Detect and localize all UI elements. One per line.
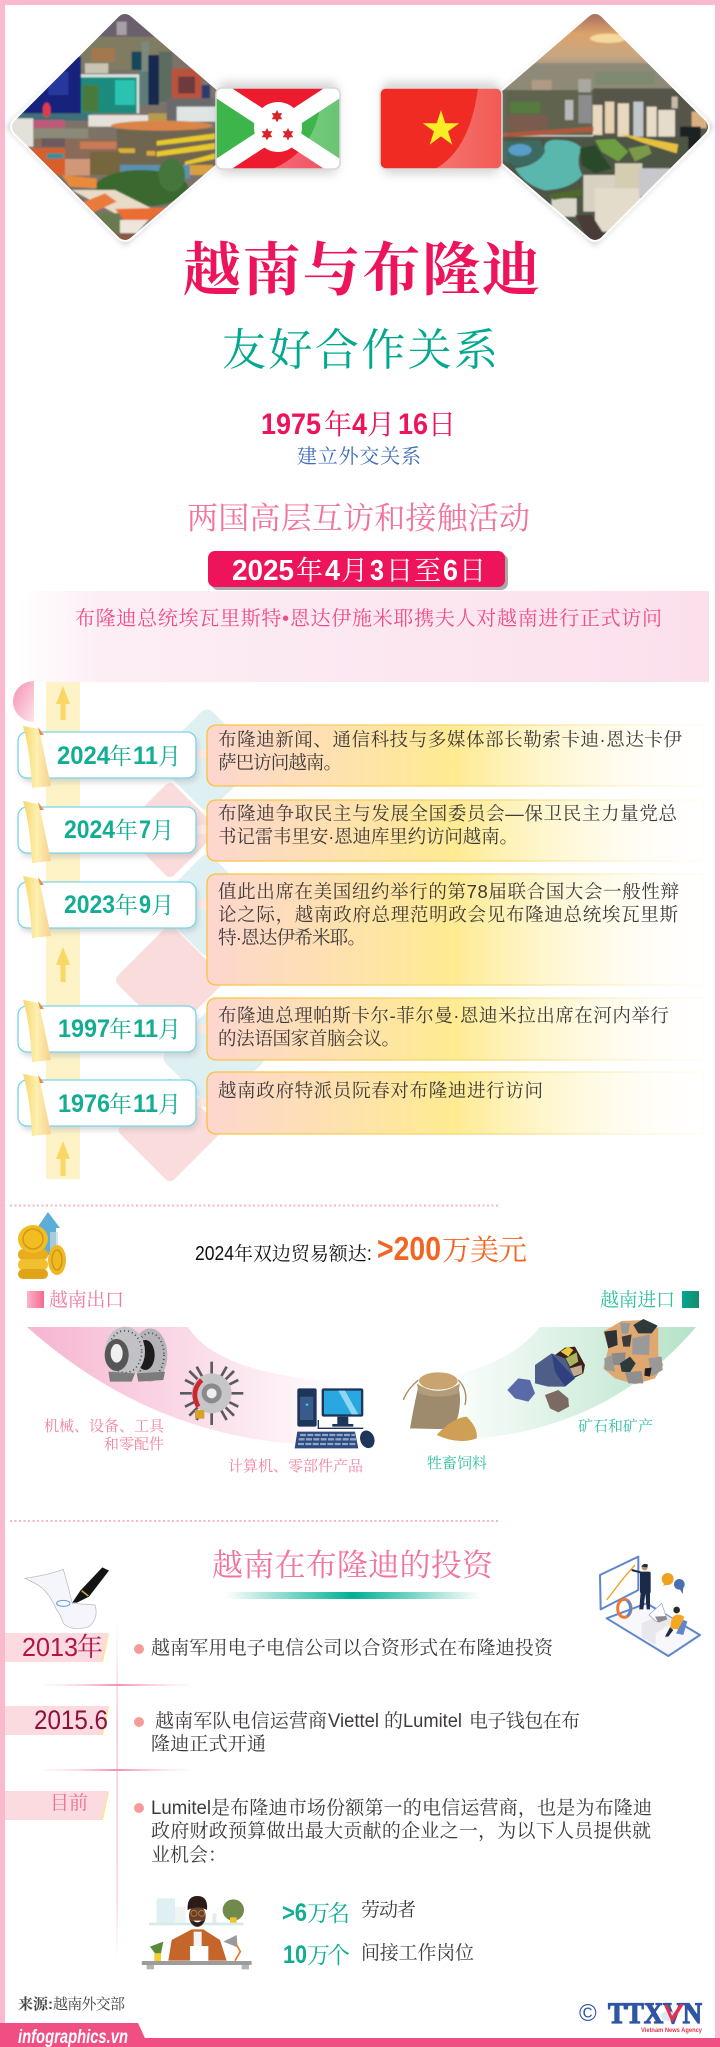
icon: coins and arrow	[18, 1212, 66, 1279]
label: machinery: 和零配件	[104, 1436, 164, 1453]
establishment date: 1975	[261, 408, 321, 441]
timeline item: 2024年11月: 月	[158, 743, 181, 769]
footer bar	[0, 2023, 720, 2047]
timeline item: 1997年11月: 布隆迪总理帕斯卡尔-菲尔曼·恩迪米拉出席在河内举行	[218, 1005, 669, 1026]
import arc band	[440, 1327, 696, 1440]
year tag: 2013年	[5, 1632, 109, 1662]
investment item: current	[134, 1797, 652, 1866]
icon: computer	[295, 1388, 377, 1450]
icon: worker at desk	[142, 1896, 252, 1969]
bilateral trade figure: 万美元	[442, 1234, 527, 1267]
photo: Vietnam city in diamond	[501, 14, 715, 247]
timeline item: 2024年7月: 布隆迪争取民主与发展全国委员会—保卫民主力量党总	[218, 803, 677, 824]
flag: Burundi	[216, 82, 340, 174]
timeline item: 2024年7月: 2024	[64, 816, 115, 844]
timeline item: 2024年7月: 书记雷韦里安·恩迪库里约访问越南。	[218, 826, 518, 847]
panel: official visit ribbon	[17, 591, 709, 682]
stat: indirect jobs: 间接工作岗位	[361, 1942, 474, 1964]
establishment date: 16	[398, 408, 428, 441]
legend: Vietnam exports: 越南出口	[49, 1289, 124, 1311]
investment item: current: 业机会：	[151, 1844, 227, 1866]
timeline item: 1997年11月: 11	[133, 1015, 158, 1043]
timeline item: 1997年11月: 月	[158, 1016, 181, 1042]
bilateral trade figure: 2024	[195, 1243, 234, 1265]
heading: investment: 越南在布隆迪的投资	[212, 1548, 494, 1583]
establishment date: 月	[367, 409, 395, 440]
bilateral trade figure	[195, 1230, 527, 1267]
timeline item: 1976年11月: 越南政府特派员阮春对布隆迪进行访问	[218, 1080, 543, 1101]
year tag: 2013年: 2013	[22, 1632, 78, 1662]
icon: brake discs	[105, 1327, 167, 1382]
background diamonds	[113, 706, 268, 1184]
timeline item: 2023年9月	[18, 874, 703, 985]
investment item: 2015.6: 电子钱包在布	[469, 1710, 580, 1732]
source: 越南外交部	[53, 1996, 125, 2013]
timeline item: 2024年11月: 2024	[57, 742, 110, 770]
heading: high-level visits: 两国高层互访和接触活动	[187, 501, 530, 536]
vertical timeline line	[116, 1620, 118, 1960]
stat: indirect jobs	[283, 1941, 474, 1969]
establishment date: 日	[428, 409, 456, 440]
icon: rocks	[507, 1347, 585, 1412]
label: computers: 计算机、零部件产品	[228, 1458, 363, 1475]
date pill: 4	[325, 555, 340, 587]
timeline item: 2024年11月	[18, 725, 703, 788]
stat: indirect jobs: 10	[283, 1941, 307, 1969]
stat: workers: 劳动者	[361, 1899, 416, 1921]
logo: TTXVN: ©	[579, 2000, 597, 2027]
timeline item: 1976年11月: 年	[109, 1091, 132, 1117]
timeline item: 2024年7月	[18, 800, 703, 863]
legend: Vietnam imports: 越南进口	[600, 1289, 675, 1311]
stat: workers	[282, 1899, 416, 1927]
investment item: 2015.6: 隆迪正式开通	[151, 1733, 266, 1755]
bilateral trade figure: >200	[377, 1230, 441, 1267]
date pill: 日	[386, 556, 413, 586]
investment item: 2015.6: 越南军队电信运营商	[155, 1710, 327, 1732]
establishment caption: 建立外交关系	[297, 445, 421, 468]
timeline item: 1976年11月: 月	[158, 1091, 181, 1117]
timeline item: 2023年9月: 2023	[64, 891, 115, 919]
flag: Vietnam	[380, 82, 502, 174]
date pill: 6	[443, 555, 458, 587]
investment item: 2013: 越南军用电子电信公司以合资形式在布隆迪投资	[151, 1637, 554, 1659]
investment item: current: 政府财政预算做出最大贡献的企业之一，为以下人员提供就	[151, 1820, 651, 1842]
icon: machine parts	[180, 1362, 243, 1425]
timeline item: 2024年11月: 布隆迪新闻、通信科技与多媒体部长勒索卡迪·恩达卡伊	[218, 729, 682, 750]
heading underline	[225, 1592, 480, 1599]
subtitle: 友好合作关系	[222, 314, 498, 378]
timeline item: 2023年9月: 值此出席在美国纽约举行的第78届联合国大会一般性辩	[218, 881, 679, 902]
date pill	[208, 551, 508, 590]
timeline item: 1997年11月: 年	[109, 1016, 132, 1042]
timeline item: 2024年7月: 月	[151, 817, 174, 843]
establishment date: 4	[352, 408, 367, 441]
investment item: 2015.6: Lumitel	[403, 1711, 462, 1732]
label: animal feed: 牲畜饲料	[427, 1455, 487, 1472]
timeline item: 2024年11月: 11	[133, 742, 158, 770]
timeline item: 1976年11月: 1976	[58, 1090, 110, 1118]
date pill: 至	[414, 556, 441, 586]
investment item: current: 是布隆迪市场份额第一的电信运营商，也是为布隆迪	[211, 1797, 652, 1819]
year tag: 2013年: 年	[77, 1632, 103, 1662]
title: 越南与布隆迪	[183, 223, 540, 307]
icon: document and pen	[25, 1567, 109, 1629]
label: minerals: 矿石和矿产	[578, 1418, 653, 1435]
timeline item: 2023年9月: 特·恩达伊希米耶。	[218, 927, 366, 948]
photo: Burundi city in diamond	[5, 14, 216, 247]
timeline item: 2023年9月: 月	[151, 892, 174, 918]
timeline item: 1997年11月: 1997	[58, 1015, 110, 1043]
year tag: current	[5, 1791, 109, 1820]
date pill: 年	[296, 556, 323, 586]
timeline item: 2023年9月: 论之际，越南政府总理范明政会见布隆迪总统埃瓦里斯	[218, 904, 678, 925]
investment item: 2015.6	[134, 1710, 580, 1755]
bilateral trade figure: 年双边贸易额达:	[234, 1243, 372, 1265]
ribbon curl	[13, 681, 34, 722]
export arc band	[27, 1327, 345, 1445]
timeline item: 2024年11月: 萨巴访问越南。	[218, 752, 342, 773]
timeline item: 2024年7月: 年	[115, 817, 138, 843]
label: machinery: 机械、设备、工具	[44, 1417, 165, 1435]
timeline item: 1997年11月: 的法语国家首脑会议。	[218, 1028, 400, 1049]
establishment date: 年	[324, 409, 352, 440]
timeline item: 1997年11月	[18, 998, 703, 1062]
timeline band with arrows	[46, 682, 80, 1179]
year tag: 2015.6	[5, 1705, 109, 1735]
logo: TTXVN: TTXVN	[608, 1997, 702, 2030]
stat: indirect jobs: 万个	[307, 1942, 350, 1968]
icon: ore chunk	[603, 1319, 663, 1384]
investment item: current: Lumitel	[151, 1798, 211, 1819]
timeline item: 2023年9月: 年	[115, 892, 138, 918]
date pill: 2025	[232, 555, 294, 587]
logo: TTXVN	[579, 1997, 702, 2034]
stat: workers: >6	[282, 1899, 307, 1927]
timeline item: 2024年7月: 7	[139, 816, 151, 844]
date pill: 日	[459, 556, 486, 586]
panel: official visit ribbon: 布隆迪总统埃瓦里斯特•恩达伊施米耶携夫人对越南进行正式访问	[75, 607, 662, 630]
timeline item: 1976年11月: 11	[133, 1090, 158, 1118]
timeline item: 2024年11月: 年	[109, 743, 132, 769]
logo: TTXVN: Vietnam News Agency	[641, 2027, 702, 2034]
icon: feed sack	[403, 1372, 477, 1441]
year tag: current: 目前	[50, 1792, 88, 1814]
date pill: 月	[341, 556, 368, 586]
investment item: 2015.6: 的	[384, 1710, 403, 1732]
year tag: 2015.6: 2015.6	[34, 1705, 108, 1735]
timeline item: 2023年9月: 9	[139, 891, 151, 919]
source: 来源:	[18, 1995, 53, 2013]
timeline item: 1976年11月	[18, 1072, 703, 1136]
icon: business analysis	[600, 1557, 700, 1656]
stat: workers: 万名	[307, 1900, 350, 1926]
date pill: 3	[370, 555, 384, 587]
investment item: 2015.6: Viettel	[328, 1711, 379, 1732]
